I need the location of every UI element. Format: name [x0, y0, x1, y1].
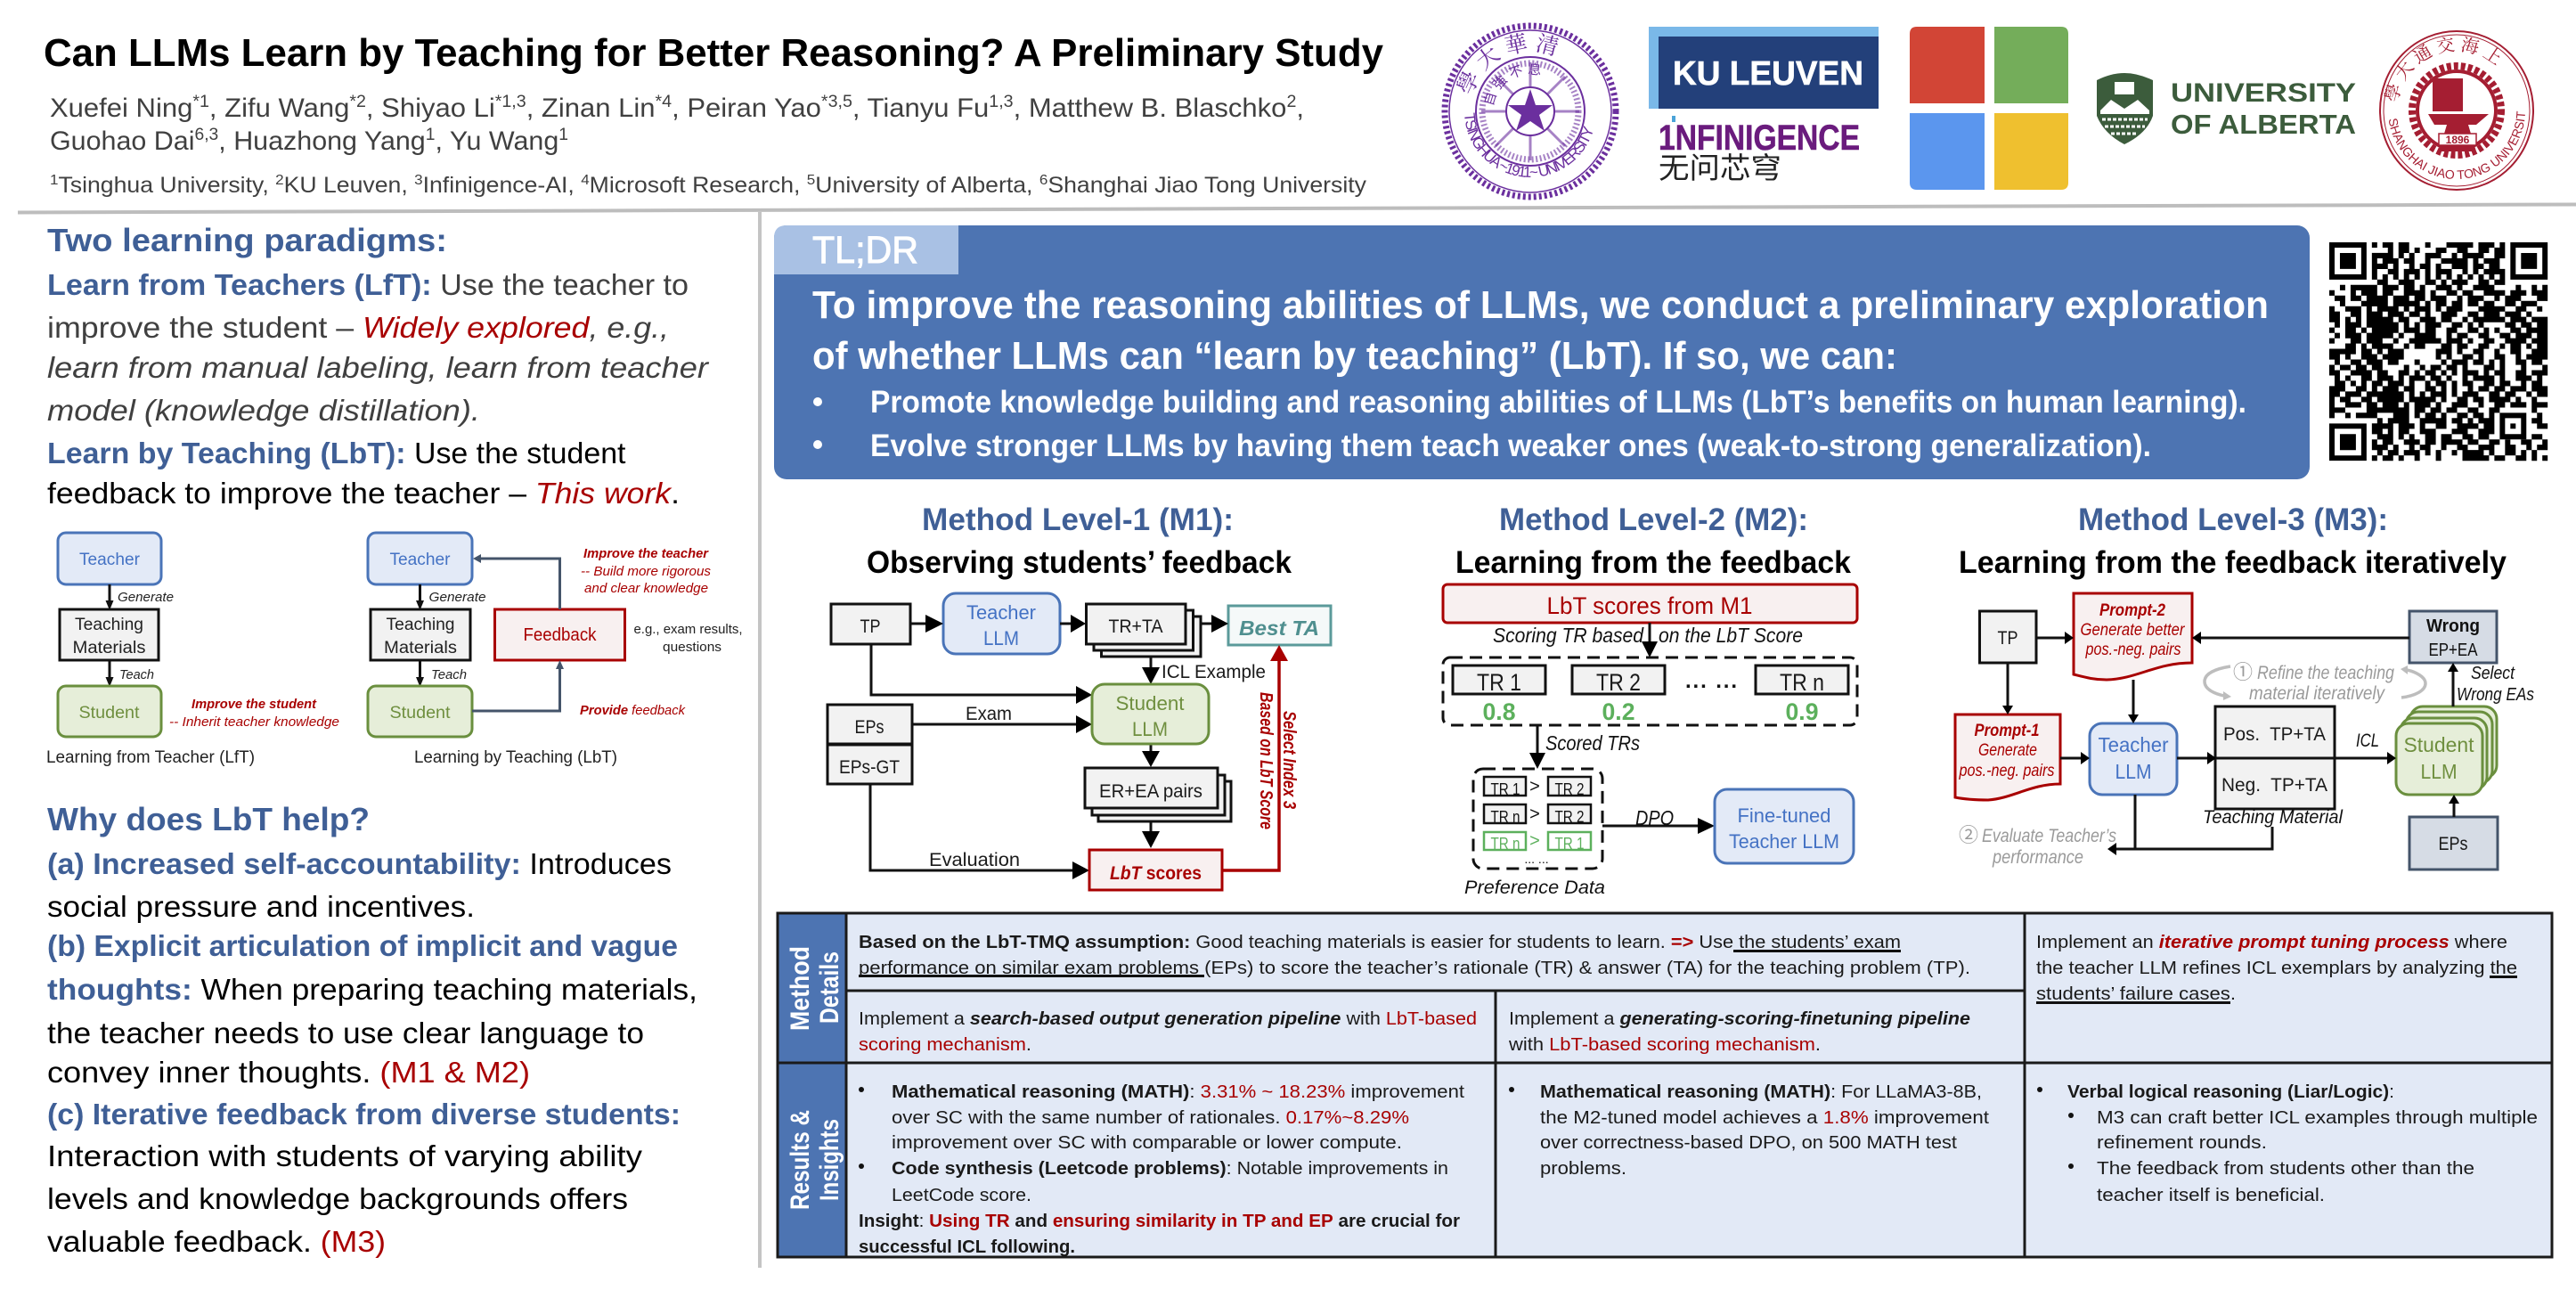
label: evaluate performance: performance: [1992, 847, 2083, 868]
logo: Microsoft: [1910, 27, 2068, 190]
row label: method details: Details: [815, 951, 844, 1024]
label: refine iteratively: material iteratively: [2249, 683, 2385, 704]
heading: two learning paradigms: Two learning paradigms:: [47, 222, 447, 258]
diagram: learning by teaching: Materials: [384, 639, 457, 657]
stack: student LLM: Student: [2403, 733, 2474, 756]
diagram: learning by teaching: Provide feedback: [580, 703, 686, 718]
text: shared method assumption: [859, 932, 1970, 978]
text block: LbT: feedback to improve the teacher – This work .: [47, 477, 680, 510]
box: EPs and EPs-GT: [827, 705, 912, 784]
group: preference data: TR 2: [1555, 808, 1584, 826]
group: scored teaching rationales: 0.2: [1602, 698, 1635, 725]
heading: method level 3: [1959, 502, 2507, 580]
logo: Tsinghua University: 自 強 不 息: [1484, 62, 1541, 105]
text: M3 results: The feedback from students other than the: [2097, 1158, 2474, 1179]
box: fine-tuned teacher LLM: [1715, 789, 1854, 863]
text: M3 method: Implement an iterative prompt tuning process where: [2036, 932, 2507, 952]
heading: method level 1: Observing students’ feedback: [867, 545, 1292, 580]
text block: reason b: convey inner thoughts. (M1 & M2): [47, 1056, 530, 1089]
label: ICL example: ICL Example: [1162, 662, 1266, 682]
row label: method details: Method: [786, 946, 815, 1031]
arrows: top row: [870, 615, 1228, 879]
group: preference data: [1473, 769, 1602, 869]
authors: Guohao Dai: [50, 127, 192, 156]
group: preference data: TR 2: [1555, 780, 1584, 798]
text: M2 method: [1508, 1008, 1970, 1055]
box: best TA: [1228, 606, 1331, 645]
affiliations: Microsoft Research,: [590, 173, 807, 198]
logo: Infinigence: 1NFINIGENCE: [1659, 118, 1860, 158]
diagram: learning by teaching: Learning by Teaching (LbT): [414, 748, 617, 767]
table: teaching material: Pos. TP+TA: [2223, 724, 2326, 745]
heading: why does LbT help: Why does LbT help?: [47, 801, 370, 837]
text: M1 results: successful ICL following.: [859, 1237, 1075, 1257]
authors: , Peiran Yao: [672, 94, 821, 123]
authors: 1: [558, 126, 568, 144]
logo: University of Alberta: [2097, 73, 2356, 144]
group: preference data: >: [1529, 831, 1540, 851]
document: prompt 1: Generate: [1978, 741, 2037, 760]
text block: LbT: [47, 437, 680, 510]
box: TP: [1979, 611, 2036, 663]
box: wrong EP+EA: EP+EA: [2428, 641, 2478, 660]
text: M3 results: teacher itself is beneficial.: [2097, 1185, 2325, 1205]
text: M1 results: [859, 1082, 1464, 1257]
label: exam: Exam: [966, 704, 1012, 724]
box: fine-tuned teacher LLM: Fine-tuned: [1737, 804, 1831, 827]
authors: 1,3: [989, 93, 1014, 111]
box: teacher LLM: [2090, 723, 2177, 795]
box: EPs and EPs-GT: EPs-GT: [839, 757, 900, 778]
box: TP: TP: [1997, 628, 2018, 649]
text: M2 method: Implement a generating-scoring-finetuning pipeline: [1509, 1008, 1970, 1029]
panel: TL;DR: [774, 225, 2310, 479]
logo: Tsinghua University: 學 大 華 清: [1455, 32, 1559, 94]
diagram: learning from teacher: Teacher: [79, 551, 141, 569]
text: M2 results: problems.: [1540, 1158, 1626, 1179]
authors: , Matthew B. Blaschko: [1014, 94, 1286, 123]
label: select index: [1256, 692, 1299, 829]
authors: *1: [192, 93, 209, 111]
diagram: learning by teaching: [368, 533, 743, 767]
label: select wrong EAs: Select: [2471, 664, 2515, 683]
box: fine-tuned teacher LLM: Teacher LLM: [1729, 830, 1839, 853]
group: scored teaching rationales: TR n: [1780, 669, 1824, 696]
box: wrong EP+EA: Wrong: [2426, 616, 2480, 636]
text: M2 results: [1509, 1082, 1989, 1179]
box: TP: [831, 604, 910, 644]
text: M2 method: with LbT-based scoring mechanism .: [1508, 1034, 1821, 1055]
stack: TR+TA: [1087, 604, 1201, 657]
text block: reason b: [47, 929, 697, 1089]
group: preference data: >: [1529, 804, 1540, 824]
authors: [50, 93, 1304, 156]
box: student LLM: LLM: [1132, 718, 1168, 740]
text block: LbT: Learn by Teaching (LbT): Use the student: [47, 437, 625, 469]
label: refine iteratively: [2233, 661, 2394, 704]
diagram: method level 3: [1955, 593, 2534, 870]
group: preference data: ... ...: [1524, 852, 1549, 866]
text: shared method assumption: performance on similar exam problems (EPs) to score the teacher’s rationale (TR) & answer (TA) for the teaching problem (TP).: [859, 958, 1970, 978]
affiliations: Infinigence-AI,: [423, 173, 581, 198]
diagram: learning by teaching: Student: [390, 704, 451, 723]
text: M2 results: over correctness-based DPO, on 500 MATH test: [1540, 1132, 1957, 1153]
diagram: learning by teaching: Improve the teacher: [583, 546, 709, 561]
text block: summary: [812, 283, 2269, 463]
box: student LLM: [1092, 684, 1209, 744]
title: Can LLMs Learn by Teaching for Better Reasoning? A Preliminary Study: [44, 31, 1384, 75]
text: M3 method: the teacher LLM refines ICL exemplars by analyzing the: [2036, 958, 2517, 978]
panel: two learning paradigms: [47, 222, 710, 510]
document: prompt 2: [2074, 593, 2192, 680]
box: best TA: Best TA: [1239, 616, 1319, 640]
group: scored teaching rationales: ... ...: [1685, 669, 1737, 693]
tab: TL;DR: TL;DR: [812, 229, 918, 272]
box: teacher LLM: LLM: [983, 627, 1019, 649]
diagram: learning by teaching: Teacher: [390, 551, 451, 569]
group: scored teaching rationales: 0.9: [1785, 698, 1819, 725]
text: M3 method: [2036, 932, 2517, 1004]
panel: why does LbT help: [47, 801, 697, 1258]
diagram: learning from teacher: Learning from Teacher (LfT): [46, 748, 255, 767]
heading: method level 3: Method Level-3 (M3):: [2078, 502, 2388, 537]
label: scoring: on the LbT Score: [1659, 624, 1803, 647]
header divider: [18, 205, 2576, 212]
box: teacher LLM: [943, 593, 1060, 654]
group: preference data: TR 1: [1555, 835, 1584, 853]
arrow: DPO: [1602, 818, 1715, 834]
text: M3 results: refinement rounds.: [2097, 1132, 2267, 1153]
document: prompt 2: Prompt-2: [2099, 601, 2165, 620]
diagram: learning from teacher: Teach: [119, 667, 154, 682]
heading: method level 2: [1455, 502, 1852, 580]
text: M3 method: students’ failure cases.: [2036, 984, 2236, 1004]
text block: summary: To improve the reasoning abilities of LLMs, we conduct a preliminary exploration: [812, 283, 2269, 327]
document: prompt 1: Prompt-1: [1974, 722, 2040, 740]
arrow: scoring: [1642, 623, 1658, 657]
authors: ,: [1296, 94, 1304, 123]
label: scoring: [1493, 624, 1803, 647]
table: teaching material: [2215, 706, 2335, 809]
logo: Infinigence: 无问芯穹: [1659, 151, 1781, 184]
affiliations: Shanghai Jiao Tong University: [1048, 173, 1367, 198]
diagram: learning from teacher: Teaching: [75, 616, 143, 634]
row label: method details: [778, 913, 846, 1063]
affiliations: 1: [50, 173, 59, 188]
label: evaluate performance: Evaluate Teacher’s: [1982, 826, 2116, 846]
text block: LfT: learn from manual labeling, learn from teacher: [47, 351, 710, 384]
text: M1 method: Implement a search-based output generation pipeline with LbT-based: [859, 1008, 1477, 1029]
authors: , Zifu Wang: [209, 94, 349, 123]
text block: reason b: (b) Explicit articulation of implicit and vague: [47, 929, 678, 962]
stack: student LLM: [2396, 706, 2497, 795]
group: scored teaching rationales: 0.8: [1482, 698, 1516, 725]
text: M3 results: M3 can craft better ICL examples through multiple: [2097, 1107, 2538, 1128]
arrow: scored TRs: [1529, 725, 1545, 769]
group: preference data: >: [1529, 777, 1540, 796]
heading: method level 1: [867, 502, 1292, 580]
affiliations: University of Alberta,: [815, 173, 1039, 198]
label: evaluate performance: [1959, 824, 2116, 868]
arrow: select best: [1222, 645, 1288, 870]
stack: TR+TA: TR+TA: [1108, 616, 1163, 637]
document: prompt 2: pos.-neg. pairs: [2085, 641, 2181, 659]
label: select wrong EAs: [2457, 664, 2534, 705]
diagram: learning from teacher: Improve the student: [192, 697, 317, 712]
diagram: learning from teacher: Materials: [73, 639, 146, 657]
group: preference data: TR 1: [1491, 780, 1520, 798]
text: M3 results: Verbal logical reasoning (Liar/Logic) :: [2067, 1082, 2394, 1102]
label: ICL: ICL: [2356, 731, 2379, 751]
box: wrong EP+EA: [2409, 611, 2497, 663]
logo: Shanghai Jiao Tong University: 學 大 通 交 海 上: [2384, 36, 2499, 102]
text block: reason a: (a) Increased self-accountability: Introduces: [47, 847, 672, 880]
stack: student LLM: LLM: [2421, 760, 2457, 783]
label: refine iteratively: Refine the teaching: [2257, 663, 2394, 683]
group: scored teaching rationales: [1443, 657, 1857, 725]
authors: , Yu Wang: [435, 127, 558, 156]
label: select index: Based on LbT Score: [1256, 692, 1276, 829]
text block: reason a: social pressure and incentives.: [47, 890, 475, 923]
diagram: learning by teaching: Teaching: [387, 616, 454, 634]
group: scored teaching rationales: TR 1: [1477, 669, 1521, 696]
text: M1 method: [859, 1008, 1477, 1055]
logo: KU Leuven: [1649, 27, 1879, 109]
affiliations: 4: [581, 173, 590, 188]
diagram: method level 2: [1443, 584, 1857, 898]
box: LbT scores from M1: LbT scores from M1: [1546, 592, 1753, 619]
box: EPs: [2409, 817, 2498, 870]
text block: LfT: improve the student – Widely explored , e.g.,: [47, 311, 669, 344]
authors: , Zinan Lin: [526, 94, 656, 123]
authors: *4: [656, 93, 673, 111]
logo: University of Alberta: OF ALBERTA: [2171, 109, 2356, 140]
text block: reason c: (c) Iterative feedback from diverse students:: [47, 1098, 681, 1131]
diagram: learning by teaching: Teach: [431, 667, 467, 682]
QR code: [2327, 240, 2550, 463]
table: teaching material: Neg. TP+TA: [2221, 775, 2327, 796]
row label: results and insights: [778, 1063, 846, 1257]
logo: Infinigence: [1659, 116, 1860, 184]
authors: , Shiyao Li: [366, 94, 495, 123]
group: preference data: TR n: [1491, 808, 1520, 826]
label: scoring: Scoring TR based: [1493, 624, 1644, 647]
heading: method level 2: Learning from the feedback: [1455, 545, 1852, 580]
diagram: learning from teacher: [46, 533, 339, 767]
label: select index: Select Index 3: [1279, 711, 1299, 809]
authors: Xuefei Ning: [50, 94, 188, 123]
box: teacher LLM: Teacher: [2099, 733, 2169, 756]
icon: refine cycle arrows: [2205, 665, 2425, 700]
text block: summary: of whether LLMs can “learn by teaching” (LbT). If so, we can:: [812, 334, 1897, 378]
heading: method level 1: Method Level-1 (M1):: [922, 502, 1234, 537]
stack: ER+EA pairs: [1085, 768, 1231, 821]
authors: *2: [349, 93, 366, 111]
diagram: learning from teacher: Student: [78, 704, 140, 723]
document: prompt 2: Generate better: [2081, 621, 2185, 640]
document: prompt 1: pos.-neg. pairs: [1959, 762, 2055, 780]
box: teacher LLM: Teacher: [966, 601, 1036, 624]
box: EPs: EPs: [2439, 834, 2467, 854]
text: M2 results: Mathematical reasoning (MATH) : For LLaMA3-8B,: [1540, 1082, 1982, 1102]
text: M1 results: over SC with the same number of rationales. 0.17%~8.29%: [892, 1107, 1409, 1128]
diagram: learning from teacher: Generate: [118, 590, 174, 605]
tab: TL;DR: [774, 225, 958, 274]
text block: reason c: valuable feedback. (M3): [47, 1225, 386, 1258]
logo: Tsinghua University: [1441, 23, 1619, 200]
label: teaching material: Teaching Material: [2203, 807, 2344, 828]
text block: LfT: model (knowledge distillation).: [47, 394, 480, 427]
label: preference data: Preference Data: [1464, 878, 1605, 898]
text block: summary: Promote knowledge building and reasoning abilities of LLMs (LbT’s benefits on human learning).: [870, 385, 2246, 420]
column divider: [758, 212, 762, 1268]
box: student LLM: Student: [1115, 692, 1185, 714]
diagram: learning from teacher: -- Inherit teacher knowledge: [169, 714, 339, 730]
authors: 2: [1286, 93, 1296, 111]
label: select wrong EAs: Wrong EAs: [2457, 685, 2534, 705]
diagram: learning by teaching: Feedback: [524, 625, 597, 645]
diagram: learning by teaching: questions: [663, 640, 721, 655]
text block: reason c: Interaction with students of varying ability: [47, 1139, 643, 1172]
arrows: flow: [2002, 632, 2459, 855]
authors: , Tianyu Fu: [852, 94, 989, 123]
box: TP: TP: [860, 616, 880, 637]
logo: Shanghai Jiao Tong University: 1896: [2446, 134, 2470, 146]
text block: reason b: thoughts: When preparing teaching materials,: [47, 973, 697, 1006]
heading: method level 3: Learning from the feedback iteratively: [1959, 545, 2507, 580]
affiliations: 2: [275, 173, 284, 188]
affiliations: KU Leuven,: [284, 173, 414, 198]
affiliations: 6: [1039, 173, 1048, 188]
authors: *1,3: [495, 93, 526, 111]
authors: 1: [426, 126, 435, 144]
box: LbT scores: [1089, 850, 1222, 890]
diagram: learning by teaching: and clear knowledge: [584, 581, 708, 596]
text: M1 results: Insight: Using TR and ensuring similarity in TP and EP are crucial for: [859, 1211, 1460, 1231]
heading: method level 2: Method Level-2 (M2):: [1499, 502, 1808, 537]
label: scored TRs: Scored TRs: [1545, 731, 1640, 755]
text: M1 method: scoring mechanism .: [859, 1034, 1031, 1055]
text: M2 results: the M2-tuned model achieves a 1.8% improvement: [1540, 1107, 1989, 1128]
text block: reason c: levels and knowledge backgrounds offers: [47, 1182, 628, 1215]
text: shared method assumption: Based on the LbT-TMQ assumption: Good teaching materials is easier for students to learn. => Use the students’ exam: [859, 932, 1901, 952]
label: evaluation: Evaluation: [929, 850, 1020, 870]
affiliations: 5: [807, 173, 815, 188]
text block: reason a: [47, 847, 672, 923]
label: evaluate performance: ②: [1959, 824, 1978, 846]
logo: KU Leuven: KU LEUVEN: [1673, 55, 1863, 93]
group: preference data: TR n: [1491, 835, 1520, 853]
text block: LfT: [47, 268, 710, 427]
box: LbT scores from M1: [1443, 584, 1857, 623]
text: M1 results: Code synthesis (Leetcode problems) : Notable improvements in: [892, 1158, 1448, 1179]
logo: Tsinghua University: TSINGHUA ~1911~ UNIVERSITY: [1464, 112, 1593, 177]
authors: *3,5: [821, 93, 852, 111]
box: LbT scores: LbT scores: [1110, 863, 1202, 884]
text: M3 results: [2037, 1082, 2538, 1205]
text block: reason b: the teacher needs to use clear language to: [47, 1016, 644, 1049]
text block: LfT: Learn from Teachers (LfT): Use the teacher to: [47, 268, 689, 301]
row label: results and insights: Insights: [815, 1119, 844, 1201]
logo: University of Alberta: UNIVERSITY: [2171, 78, 2356, 108]
diagram: learning by teaching: e.g., exam results,: [634, 622, 743, 637]
authors: 6,3: [194, 126, 218, 144]
text block: summary: Evolve stronger LLMs by having them teach weaker ones (weak-to-strong generalization).: [870, 429, 2151, 463]
diagram: method level 1: [827, 593, 1331, 890]
affiliations: Tsinghua University,: [58, 173, 275, 198]
document: prompt 1: [1955, 714, 2060, 800]
label: DPO: DPO: [1635, 806, 1674, 829]
text block: reason c: [47, 1098, 681, 1258]
box: teacher LLM: LLM: [2115, 760, 2152, 783]
text: M1 results: improvement over SC with comparable or lower compute.: [892, 1132, 1402, 1153]
group: scored teaching rationales: TR 2: [1596, 669, 1641, 696]
logo: Shanghai Jiao Tong University: [2379, 30, 2534, 191]
diagram: learning by teaching: Generate: [429, 590, 486, 605]
authors: , Huazhong Yang: [218, 127, 426, 156]
text: M1 results: Mathematical reasoning (MATH) : 3.31% ~ 18.23% improvement: [892, 1082, 1464, 1102]
label: refine iteratively: ①: [2233, 661, 2253, 683]
affiliations: 3: [414, 173, 423, 188]
table: method details and results: [778, 913, 2552, 1257]
row label: results and insights: Results &: [786, 1110, 815, 1210]
box: EPs and EPs-GT: EPs: [855, 717, 884, 738]
diagram: learning by teaching: -- Build more rigorous: [581, 564, 712, 579]
stack: ER+EA pairs: ER+EA pairs: [1099, 781, 1202, 802]
text: M1 results: LeetCode score.: [892, 1185, 1031, 1205]
